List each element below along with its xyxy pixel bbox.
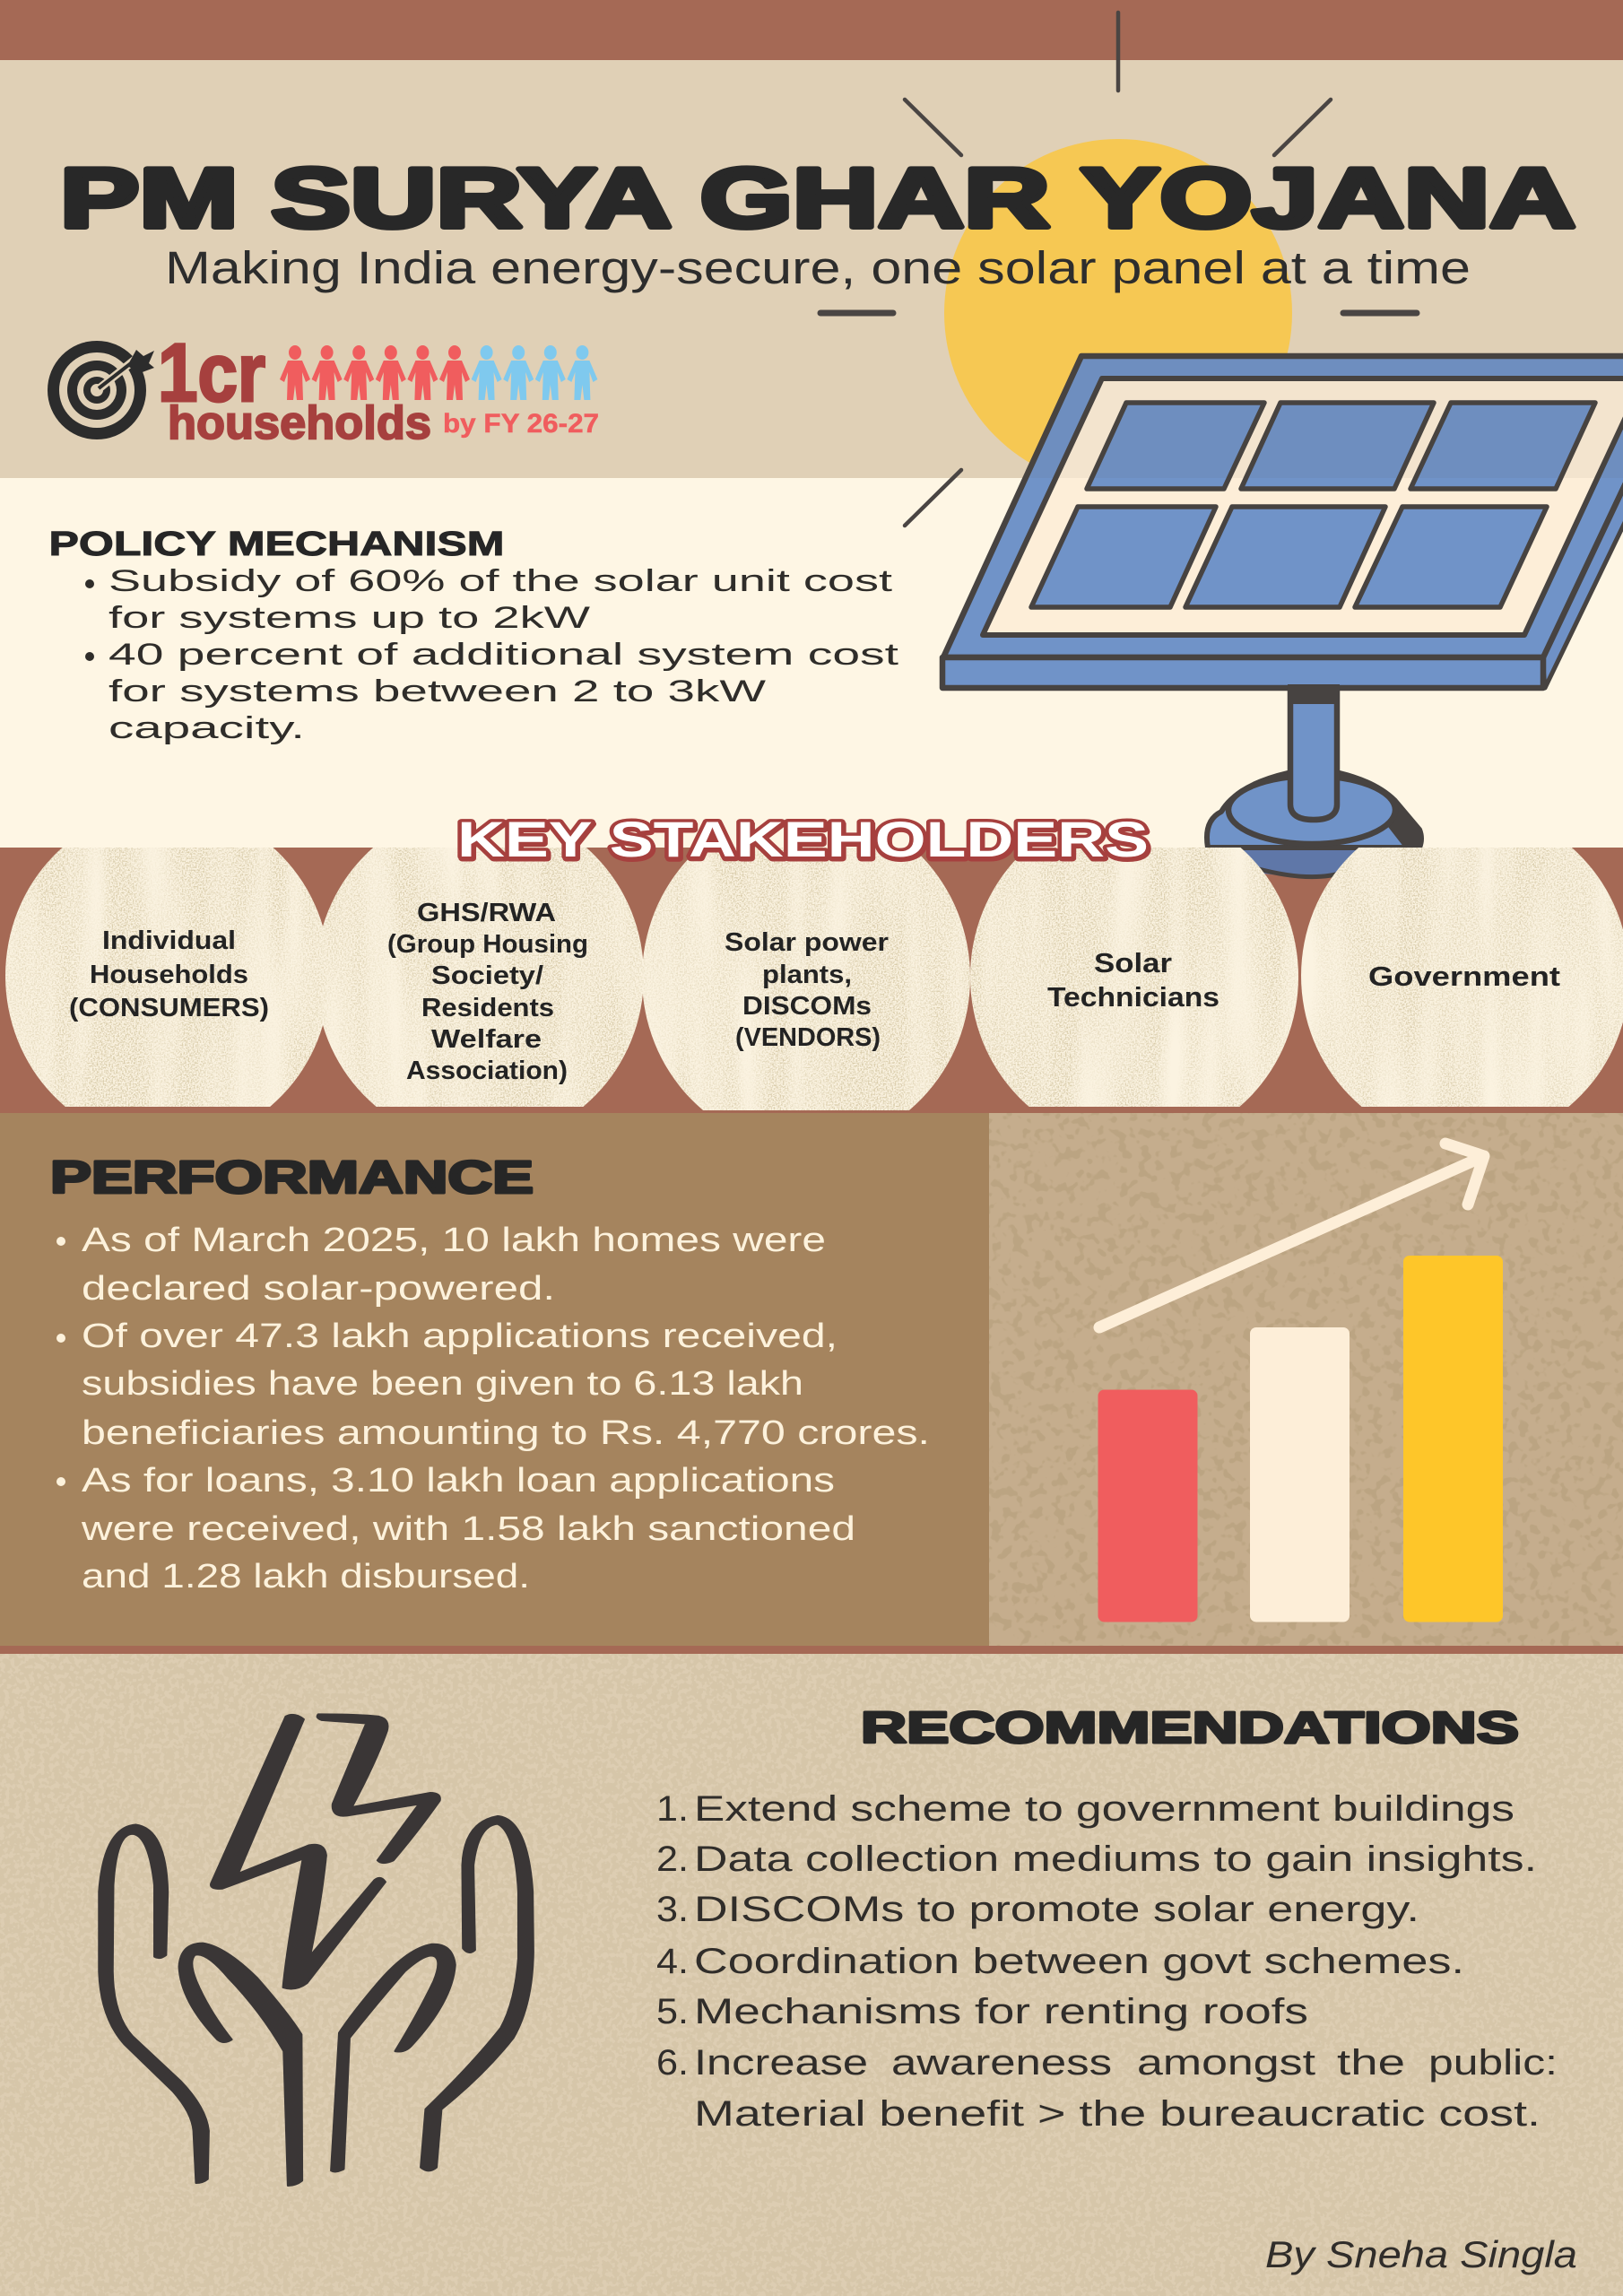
performance bullets: As of March 2025, 10 lakh homes were <box>82 1222 826 1259</box>
heading: recommendations: RECOMMENDATIONS <box>861 1704 1519 1752</box>
target: 1cr households by FY 26-27 <box>48 327 599 449</box>
bullet 2: for systems between 2 to 3kW <box>108 674 766 709</box>
stakeholder: GHS/RWA: GHS/RWA <box>417 899 556 927</box>
stakeholder: vendors: (VENDORS) <box>735 1023 881 1052</box>
bar: red <box>1098 1390 1198 1622</box>
recommendations list <box>656 1789 1558 2134</box>
performance bullets: declared solar-powered. <box>82 1270 555 1308</box>
recommendations list: 4. <box>656 1942 689 1981</box>
stakeholder: solar technicians <box>970 848 1298 1107</box>
panel: recommendations background <box>0 1654 1623 2296</box>
recommendations list: the <box>1337 2043 1405 2083</box>
performance bullets: were received, with 1.58 lakh sanctioned <box>81 1510 855 1548</box>
recommendations list: 2. <box>656 1839 689 1879</box>
bullet 1 <box>85 564 893 635</box>
panel: performance <box>0 1113 989 1646</box>
bullet 2 <box>85 638 899 745</box>
header background <box>0 60 1623 478</box>
performance bullets: subsidies have been given to 6.13 lakh <box>82 1365 803 1403</box>
panel: key stakeholders <box>5 848 1623 1110</box>
recommendations list: Extend scheme to government buildings <box>694 1789 1515 1829</box>
heading: key stakeholders: KEY STAKEHOLDERS <box>457 811 1149 867</box>
recommendations list: DISCOMs to promote solar energy. <box>694 1890 1419 1929</box>
performance bullets <box>56 1222 930 1596</box>
recommendations list: Mechanisms for renting roofs <box>694 1992 1308 2031</box>
stakeholder: individual households: Households <box>90 961 248 989</box>
recommendations list: Coordination between govt schemes. <box>694 1942 1464 1981</box>
arrow: upward trend <box>1099 1144 1484 1327</box>
recommendations list: awareness <box>891 2043 1112 2083</box>
households: households <box>168 397 431 449</box>
recommendations list: amongst <box>1137 2043 1315 2083</box>
bullet 1: for systems up to 2kW <box>108 601 590 635</box>
performance bullets: beneficiaries amounting to Rs. 4,770 crores. <box>82 1414 930 1452</box>
by FY 26-27: by FY 26-27 <box>443 409 599 439</box>
panel: policy mechanism <box>48 526 899 745</box>
recommendations list: Data collection mediums to gain insights. <box>694 1839 1537 1879</box>
icon: people row <box>280 345 597 400</box>
performance bullets: and 1.28 lakh disbursed. <box>82 1558 530 1596</box>
recommendations list: Increase <box>694 2043 868 2083</box>
1cr: 1cr <box>158 327 265 419</box>
bullet 1: Subsidy of 60% of the solar unit cost <box>108 564 893 598</box>
stakeholder: government: Government <box>1368 961 1560 992</box>
subtitle: Making India energy-secure, one solar panel at a time <box>165 242 1471 293</box>
icon: sun <box>820 13 1417 526</box>
stakeholder: individual households: (CONSUMERS) <box>69 994 269 1022</box>
heading: performance: PERFORMANCE <box>50 1152 534 1203</box>
stakeholder: GHS/RWA: Association) <box>406 1057 568 1085</box>
policy background <box>0 478 1623 848</box>
stakeholder: GHS/RWA: Welfare <box>431 1025 542 1054</box>
stakeholder: individual households <box>5 848 323 1107</box>
performance bullets: Of over 47.3 lakh applications received, <box>82 1318 838 1355</box>
performance bullets: As for loans, 3.10 lakh loan applications <box>82 1462 835 1500</box>
stakeholder: GHS/RWA: Society/ <box>431 961 543 990</box>
stakeholder: government <box>1301 848 1623 1107</box>
bar: cream <box>1250 1327 1350 1622</box>
byline: By Sneha Singla <box>1265 2233 1577 2275</box>
recommendations list: public: <box>1428 2043 1558 2083</box>
icon: hands holding lightning bolt <box>99 1714 534 2186</box>
stakeholder: GHS/RWA <box>323 848 643 1107</box>
stakeholder: vendors: plants, <box>762 961 852 989</box>
stakeholder: GHS/RWA: (Group Housing <box>387 930 588 959</box>
stakeholder: solar technicians: Solar <box>1094 947 1172 978</box>
stakeholder: vendors: DISCOMs <box>742 992 872 1021</box>
chart: rising bars with arrow <box>989 1113 1623 1646</box>
divider stripe <box>0 1646 1623 1654</box>
bar: yellow <box>1403 1256 1503 1622</box>
recommendations list: 6. <box>656 2043 689 2083</box>
stakeholder: individual households: Individual <box>102 926 236 955</box>
bullet 2: capacity. <box>108 711 305 745</box>
stakeholder: vendors: Solar power <box>725 928 889 957</box>
icon: solar panel <box>942 347 1623 877</box>
stakeholder: vendors <box>643 848 970 1110</box>
recommendations list: 1. <box>656 1789 689 1829</box>
recommendations list: 5. <box>656 1992 689 2031</box>
bullet 2: 40 percent of additional system cost <box>108 638 899 672</box>
icon: target with arrow <box>48 341 154 439</box>
title: PM SURYA GHAR YOJANA <box>60 151 1575 245</box>
stakeholder: solar technicians: Technicians <box>1047 981 1219 1013</box>
heading: policy mechanism: POLICY MECHANISM <box>48 526 504 563</box>
stakeholders band <box>0 848 1623 1113</box>
recommendations list: Material benefit > the bureaucratic cost. <box>694 2094 1541 2134</box>
recommendations list: 3. <box>656 1890 689 1929</box>
top band <box>0 0 1623 60</box>
stakeholder: GHS/RWA: Residents <box>421 994 554 1022</box>
